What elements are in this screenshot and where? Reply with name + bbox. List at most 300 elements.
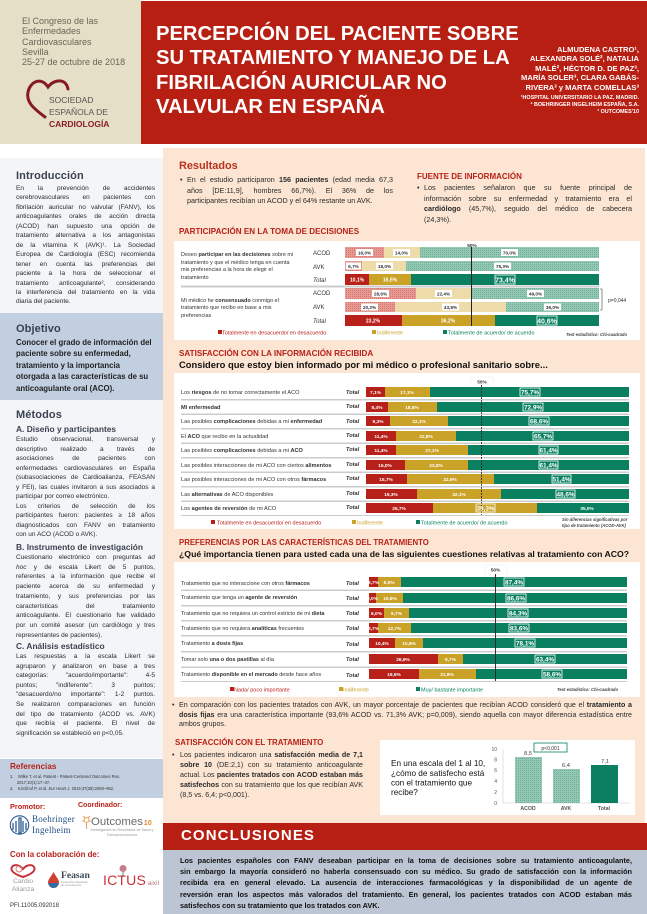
chart: satisfacción con la información: 15,7% (379, 477, 394, 483)
panel: introducción (16, 170, 155, 305)
chart: satisfacción con la información: 8,4% (372, 405, 383, 411)
reference list: 2017;10(1):17–37. (17, 780, 50, 785)
text: análisis: categorías: "acuerdo/importante": 4-5 (16, 672, 155, 679)
chart: participación en la toma de decisiones: 43,8% (444, 305, 458, 310)
chart: satisfacción con la información: Total (346, 404, 360, 410)
text: diseño: participantes fueron: pacientes ≥ 18 años (16, 512, 155, 519)
chart: satisfacción con la información: Indiferente (357, 520, 383, 526)
affiliations: ¹HOSPITAL UNIVERSITARIO LA PAZ, MADRID. (521, 95, 639, 101)
heading: métodos: Métodos (16, 409, 62, 421)
chart: participación en la toma de decisiones: 73,4% (495, 278, 516, 284)
chart: satisfacción con el tratamiento: ¿cómo de satisfecho está (391, 769, 485, 778)
text: introducción: Europea de Cardiología (ESC) recomienda (16, 251, 155, 258)
chart: preferencias por las características: Total (346, 611, 359, 617)
text: introducción: tratamiento anticoagulante², considerando (16, 280, 155, 287)
chart: preferencias por las características: Total (346, 673, 359, 679)
chart: preferencias por las características: Nada/ poco importante (234, 688, 290, 694)
chart: preferencias por las características: 50% (491, 568, 501, 574)
text: instrumento: referentes a la información que recibe el (16, 573, 155, 580)
chart: satisfacción con el tratamiento: con el tratamiento que (391, 778, 472, 788)
chart: satisfacción con la información: Las posibles complicaciones debidas a mi ACO (181, 448, 304, 454)
chart: participación en la toma de decisiones: 70,0% (503, 250, 517, 256)
chart: preferencias por las características: 9,7% (445, 657, 457, 663)
footer code: PFI.11005.092018 (10, 903, 59, 909)
text: objetivo: Conocer el grado de información del (16, 338, 152, 347)
text: diseño: Estudio observacional, transversal y (16, 436, 155, 443)
chart: participación en la toma de decisiones: Test estadístico: Chi-cuadrado (566, 332, 627, 337)
chart: preferencias por las características: 78,1% (516, 640, 534, 648)
title: FIBRILACIÓN AURICULAR NO (156, 72, 447, 94)
chart: participación en la toma de decisiones: 18,0% (378, 264, 392, 269)
chart: participación en la toma de decisiones: tratamiento que recibo en base a mis (181, 305, 272, 311)
chart: participación en la toma de decisiones: 23,2% (366, 318, 381, 324)
chart: satisfacción con la información: 32,9% (443, 477, 458, 483)
logo: Feasan: de Asociaciones (61, 883, 81, 887)
authors: MARÍA SOLER³, CLARA GABÁS- (521, 73, 639, 82)
chart: participación en la toma de decisiones: Mi médico he consensuado conmigo el (181, 298, 279, 304)
chart: satisfacción con el tratamiento: Total (598, 806, 611, 812)
chart: participación en la toma de decisiones: tratamiento y que el médico tenga en cuenta (181, 260, 290, 266)
chart: satisfacción con la información: 72,9% (524, 404, 542, 412)
logo: Feasan (48, 870, 90, 888)
chart: participación en la toma de decisiones: 49,0% (529, 292, 543, 296)
subheading: satisfacción información: Considero que estoy bien informado por mi médico o profesional sanitario sobre... (179, 359, 548, 370)
heading: satisfacción información: SATISFACCIÓN CON LA INFORMACIÓN RECIBIDA (179, 349, 373, 358)
text: análisis (16, 653, 155, 737)
text: instrumento: características del tratamiento (16, 603, 155, 610)
chart: satisfacción con el tratamiento: 2 (494, 790, 497, 796)
text: introducción: fibrilación auricular no valvular (FANV), los (16, 204, 155, 211)
chart: satisfacción con la información: Total (346, 419, 360, 425)
title: PERCEPCIÓN DEL PACIENTE SOBRE (156, 23, 519, 45)
chart: preferencias por las características: 87,4% (505, 580, 523, 586)
congress details: Enfermedades (22, 26, 81, 36)
chart: participación en la toma de decisiones: p=0,044 (608, 298, 626, 304)
chart: preferencias por las características: Total (346, 596, 359, 602)
chart: satisfacción con el tratamiento: ACOD (520, 806, 536, 812)
chart: preferencias por las características: 3,7% (368, 626, 380, 632)
logo: Ictus (103, 865, 159, 888)
reference list: 1. Wilke T, et al. Patient - Patient-Centered Outcomes Res. (10, 774, 120, 779)
heading: diseño y participantes: A. Diseño y participantes (16, 424, 116, 434)
authors (521, 45, 639, 92)
heading: coordinador: Coordinador: (78, 802, 122, 809)
chart: preferencias por las características: 19,5% (387, 672, 402, 678)
text: objetivo: tratamiento y la importancia (16, 361, 120, 370)
chart: satisfacción con la información: 48,6% (556, 492, 575, 498)
text: fuente de información (417, 183, 632, 224)
heading: fuente de información: FUENTE DE INFORMACIÓN (417, 172, 522, 181)
chart: satisfacción con el tratamiento: En una escala del 1 al 10, (391, 759, 485, 768)
heading: objetivo: Objetivo (16, 323, 61, 335)
text: conclusiones: sin embargo la mayoría consideró no haberla consensuado con su médico. Su grado de satisfacción con la información (180, 867, 632, 876)
chart: satisfacción con el tratamiento: recibe? (391, 788, 418, 797)
chart: satisfacción con la información: Las posibles complicaciones debidas a mi enfermedad (181, 419, 323, 425)
logo: Ictus: ICTUS aixil (103, 872, 159, 888)
authors: ALMUDENA CASTRO¹, (557, 45, 639, 54)
chart: satisfacción con la información (174, 373, 640, 529)
heading: participación: PARTICIPACIÓN EN LA TOMA DE DECISIONES (179, 227, 359, 236)
chart: participación en la toma de decisiones: 40,6% (537, 318, 558, 326)
chart: satisfacción con la información: Totalmente en desacuerdo/ en desacuerdo (217, 520, 321, 526)
logo: Sociedad Española de Cardiología (26, 79, 110, 129)
chart: preferencias por las características: Total (346, 657, 359, 663)
chart: satisfacción con la información: Mi enfermedad (181, 405, 221, 411)
chart: participación en la toma de decisiones: 22,4% (437, 292, 451, 296)
text: comparación bullet (172, 701, 632, 728)
chart: preferencias por las características: Tratamiento que no requiera analíticas frecuentes (181, 626, 304, 632)
chart: satisfacción con la información: Sin diferencias significativas por (562, 517, 628, 522)
chart: satisfacción con la información: Las posibles interacciones de mi ACO con otros fármacos (181, 477, 326, 483)
text: análisis: puntos; "indiferente": 3 puntos; (16, 682, 155, 689)
text: diseño: participar por correo electrónico. (16, 493, 109, 500)
chart: preferencias por las características: 10,4% (375, 641, 390, 647)
text: análisis: Las respuestas a la escala Likert se (16, 653, 155, 660)
panel: métodos (16, 409, 156, 737)
text: satisfacción tratamiento (172, 751, 363, 799)
title: SU TRATAMIENTO Y MANEJO DE LA (156, 47, 510, 69)
authors: MALÉ², HÉCTOR D. DE PAZ³, (535, 64, 639, 73)
chart: preferencias por las características: 12,7% (388, 626, 402, 632)
text: análisis: Se realizaron comparaciones en función (16, 701, 155, 708)
chart: participación en la toma de decisiones: AVK (313, 305, 325, 311)
text: objetivo: paciente sobre su enfermedad, (16, 349, 131, 358)
heading: promotor: Promotor: (10, 802, 45, 811)
chart: preferencias por las características: 83,6% (510, 626, 528, 632)
chart: participación en la toma de decisiones: 36,2% (441, 318, 456, 324)
chart: satisfacción con el tratamiento: 6,4 (562, 763, 571, 769)
logo: Cardio Alianza: Cardio (13, 878, 33, 885)
chart: satisfacción con la información: Total (346, 447, 360, 453)
chart: satisfacción con la información: Total (346, 505, 360, 511)
chart: preferencias por las características: 26,9% (396, 657, 411, 663)
chart: participación en la toma de decisiones: 16,5% (383, 278, 398, 284)
text: introducción: (ACOD) han supuesto una opción de (16, 223, 155, 230)
text: satisfacción tratamiento: actual. Los pacientes tratados con ACOD estaban más (180, 771, 363, 779)
chart: participación en la toma de decisiones (174, 241, 640, 340)
title: VALVULAR EN ESPAÑA (156, 96, 385, 118)
chart: satisfacción con el tratamiento: AVK (561, 806, 572, 812)
text: introducción: cerebrovasculares en pacientes con (16, 194, 155, 201)
chart: participación en la toma de decisiones: ACOD (313, 251, 331, 257)
text: introducción: de la vitamina K (AVK)¹. La Sociedad (16, 242, 155, 249)
chart: satisfacción con la información: 39,3% (476, 506, 495, 512)
text: diseño: enfermedades cardiovasculares en España (16, 464, 155, 472)
logo: Sociedad Española de Cardiología: ESPAÑOLA DE (49, 107, 108, 117)
chart: satisfacción con la información: tipo de tratamiento (ACOD-AVK) (562, 523, 627, 528)
logo: Outcomes 10 (82, 816, 154, 837)
text: diseño (16, 436, 155, 538)
chart: preferencias por las características: Total (346, 581, 359, 587)
text: diseño: y FEI), las cuales invitaron a sus asociados a (16, 484, 155, 490)
chart: participación en la toma de decisiones: 14,0% (395, 250, 409, 256)
text: instrumento: hoc y de escala Likert de 5 puntos, (16, 564, 155, 571)
chart: preferencias por las características: 86,6% (507, 596, 525, 602)
text: análisis: significación se estableció en p<0,05. (16, 730, 124, 737)
chart: satisfacción con la información: Las alternativas de ACO disponibles (181, 492, 274, 498)
chart: satisfacción con la información: Total (346, 476, 360, 482)
chart: satisfacción con la información: Totalmente de acuerdo/ de acuerdo (421, 520, 508, 526)
text: fuente de información: información sobre su enfermedad y tratamiento era el (424, 194, 632, 203)
text: resultados bullet: participantes recibían un ACOD y el 64% restante un AVK. (187, 196, 373, 205)
chart: participación en la toma de decisiones: Totalmente en desacuerdo/ en desacuerdo (222, 330, 326, 336)
chart: participación en la toma de decisiones: 20,2% (363, 305, 377, 310)
text: análisis: que recibía el paciente. El nivel de (16, 720, 155, 727)
chart: satisfacción con la información: 11,4% (374, 434, 388, 440)
chart: satisfacción con la información: 35,0% (580, 506, 595, 512)
text: comparación bullet: dosis fijas era una característica importante (93,6% ACOD vs. 71,3% AVK; p=0,009), siendo aquella con mayor diferencia estadística entre (179, 711, 632, 719)
chart: satisfacción con la información: 25,7% (392, 506, 407, 512)
chart: satisfacción con la información: 75,7% (521, 390, 539, 396)
panel: left column background (0, 158, 163, 758)
chart: preferencias por las características: Test estadístico: Chi-cuadrado (557, 687, 618, 692)
text: resultados bullet: En el estudio participaron 156 pacientes (edad media 67,3 (187, 175, 393, 184)
text: comparación bullet: ambos grupos. (179, 720, 226, 728)
text: conclusiones (180, 856, 632, 910)
heading: instrumento: B. Instrumento de investigación (16, 542, 143, 552)
text: diseño: descriptivo realizado a través de (16, 446, 155, 452)
chart: satisfacción con la información: Total (346, 462, 360, 468)
chart: preferencias por las características: 10,6% (383, 596, 398, 602)
chart: participación en la toma de decisiones: Total (313, 278, 326, 284)
text: introducción: anticoagulantes orales de acción directa (16, 213, 155, 220)
chart: participación en la toma de decisiones: Deseo participar en las decisiones sobre mi (181, 252, 293, 258)
chart: satisfacción con la información: 9,3% (373, 419, 384, 425)
chart: satisfacción con el tratamiento: 0 (494, 801, 497, 807)
panel: results background (163, 148, 645, 823)
authors: RIVERA³ y MARTA COMELLAS³ (526, 83, 639, 92)
chart: preferencias por las características: Tomar solo una o dos pastillas al día (181, 657, 275, 663)
header: congress panel (0, 0, 141, 144)
chart: satisfacción con la información: 51,4% (552, 476, 571, 484)
chart: satisfacción con la información: El ACO que recibo en la actualidad (181, 434, 268, 440)
text: satisfacción tratamiento: sobre 10 (DE:2,1) con su tratamiento anticoagulante (180, 761, 363, 769)
chart: satisfacción con la información: 22,8% (419, 434, 434, 440)
text: fuente de información: (24,3%). (424, 215, 451, 224)
text: diseño: con un ACO (ACOD o AVK). (16, 531, 97, 538)
logo: Outcomes 10: Outcomes10 (91, 816, 152, 828)
chart: satisfacción con la información: 27,1% (425, 448, 440, 454)
chart: participación en la toma de decisiones: Total (313, 319, 326, 325)
chart: participación en la toma de decisiones: ACOD (313, 291, 331, 297)
logo: Cardio Alianza (10, 864, 36, 893)
text: instrumento: Cuestionario electrónico con preguntas ad (16, 554, 155, 561)
panel: objetivo (0, 313, 163, 400)
chart: satisfacción con el tratamiento: p<0,001 (541, 746, 560, 752)
chart: participación en la toma de decisiones: 10,1% (350, 278, 365, 284)
reference list (10, 774, 120, 791)
chart: preferencias por las características: Tratamiento que no requiera un control estricto de mi dieta (181, 611, 325, 617)
congress details: Sevilla (22, 47, 49, 57)
chart: participación en la toma de decisiones: Totalmente de acuerdo/ de acuerdo (448, 330, 535, 336)
text: fuente de información: Los pacientes señalaron que su fuente principal de (424, 183, 632, 192)
chart: satisfacción con la información: Los riesgos de no tomar correctamente el ACO (181, 390, 300, 396)
logo: Boehringer Ingelheim (10, 814, 75, 835)
text: instrumento: representantes de pacientes). (16, 632, 102, 639)
chart: satisfacción con la información: 61,4% (539, 448, 558, 454)
chart: satisfacción con la información: 50% (477, 380, 488, 386)
text: diseño: diagnosticados con FANV en tratamiento (16, 522, 155, 528)
chart: participación en la toma de decisiones: 50% (467, 243, 478, 249)
text: satisfacción tratamiento: • (172, 751, 174, 759)
chart: satisfacción con la información: 19,3% (384, 492, 399, 498)
chart: satisfacción con la información: Total (346, 390, 360, 396)
heading: con la colaboración de: Con la colaboración de: (10, 850, 99, 859)
chart: satisfacción con la información: 65,7% (534, 434, 552, 440)
text: objetivo (16, 338, 152, 393)
chart: preferencias por las características: Tratamiento que tenga un agente de reversión (181, 595, 298, 601)
text: diseño: Los criterios de selección de los (16, 502, 155, 510)
logo: Boehringer Ingelheim: Boehringer (32, 814, 75, 824)
text: conclusiones: Los pacientes españoles con FANV deseaban participar en la toma de decisiones sobre su tratamiento anticoagulante, (180, 856, 632, 865)
chart: preferencias por las características: 10,6% (402, 641, 417, 647)
chart: participación en la toma de decisiones: 16,0% (358, 250, 372, 256)
heading: resultados: Resultados (179, 160, 238, 172)
header: red title panel (141, 1, 647, 144)
text: introducción: diaria del paciente. (16, 298, 71, 305)
chart: satisfacción con el tratamiento: 6 (494, 768, 497, 774)
text: fuente de información: cardiólogo (45,7%), seguido del médico de cabecera (424, 204, 632, 213)
chart: satisfacción con la información: Los agentes de reversión de mi ACO (181, 506, 277, 512)
title (156, 22, 519, 118)
panel: referencias (0, 759, 163, 798)
chart: satisfacción con la información: 18,8% (405, 405, 420, 411)
chart: satisfacción con el tratamiento: 8,5 (524, 751, 532, 757)
chart: satisfacción con la información: 22,1% (412, 419, 427, 425)
chart: satisfacción con el tratamiento: 7,1 (601, 759, 609, 765)
chart: preferencias por las características: 21,9% (440, 672, 455, 678)
chart: participación en la toma de decisiones: 75,3% (496, 264, 510, 269)
text: objetivo: anticoagulante oral (ACO). (16, 384, 114, 393)
text: introducción: tener en cuenta las preferencias del (16, 261, 155, 268)
chart: preferencias por las características: 6,0% (371, 611, 383, 617)
heading: introducción: Introducción (16, 170, 84, 182)
text: análisis: "desacuerdo/no importante": 1-2 puntos. (16, 691, 155, 698)
chart: preferencias por las características: 84,3% (509, 610, 527, 618)
chart: preferencias por las características: Muy/ bastante importante (421, 688, 483, 694)
chart: preferencias por las características: Total (346, 626, 359, 632)
text: conclusiones: satisfechos con su tratamiento que los tratados con AVK. (180, 901, 380, 910)
heading: referencias: Referencias (10, 762, 56, 771)
chart: satisfacción con el tratamiento: 10 (491, 747, 497, 753)
chart: preferencias por las características: 8,9% (384, 580, 395, 586)
logo: Boehringer Ingelheim: Ingelheim (32, 825, 71, 835)
congress details: El Congreso de las (22, 16, 98, 26)
chart: preferencias por las características: 3,0% (367, 596, 379, 602)
chart: satisfacción con la información: Total (346, 491, 360, 497)
logo: Sociedad Española de Cardiología: CARDIOLOGÍA (49, 119, 109, 129)
text: conclusiones: recibida era en general elevado. La ausencia de interacciones farmacológicas y la disponibilidad de un agente de (180, 878, 632, 887)
chart: preferencias por las características (174, 562, 640, 697)
chart: satisfacción con el tratamiento (380, 740, 635, 815)
affiliations: ² BOEHRINGER INGELHEIM ESPAÑA, S.A. (531, 102, 639, 108)
chart: satisfacción con la información: 61,4% (539, 462, 558, 470)
text: análisis: agruparon y analizaron en base a tres (16, 663, 155, 670)
text: introducción: paciente a la hora de seleccionar el (16, 270, 155, 277)
text: instrumento: por un comité asesor (un cardiólogo y tres (16, 622, 155, 629)
chart: participación en la toma de decisiones: Indiferente (377, 330, 403, 336)
chart: preferencias por las características: 63,4% (536, 656, 554, 664)
chart: satisfacción con la información: 15,0% (378, 463, 393, 469)
congress details (22, 16, 125, 67)
chart: participación en la toma de decisiones: 6,7% (348, 264, 360, 269)
text: fuente de información: • (417, 183, 420, 192)
chart: preferencias por las características: Tratamiento a dosis fijas (181, 641, 243, 647)
text: satisfacción tratamiento: (8,5 vs. 6,4; p<0,001). (180, 791, 249, 799)
text: objetivo: otorgada a las características de su (16, 372, 148, 381)
panel: conclusiones heading (163, 823, 647, 850)
chart: participación en la toma de decisiones: mis preferencias a la hora de elegir el (181, 267, 273, 273)
chart: satisfacción con el tratamiento: 4 (494, 779, 497, 785)
text: resultados bullet: • (180, 175, 183, 184)
reference list: 2. Kirchhof P, et al. Eur Heart J. 2016;37(38):2893–962. (10, 786, 114, 791)
heading: satisfacción tratamiento: SATISFACCIÓN CON EL TRATAMIENTO (175, 738, 323, 747)
affiliations: ³ OUTCOMES'10 (597, 109, 639, 115)
chart: participación en la toma de decisiones: 28,6% (374, 292, 388, 296)
chart: satisfacción con la información: 17,1% (400, 390, 415, 396)
chart: preferencias por las características: Tratamiento que no interaccione con otros fármacos (181, 581, 310, 587)
heading: preferencias: PREFERENCIAS POR LAS CARACTERÍSTICAS DEL TRATAMIENTO (179, 538, 429, 547)
heading: análisis estadístico: C. Análisis estadístico (16, 641, 105, 651)
text: instrumento: tratamiento, y sus preferencias por las (16, 593, 155, 600)
logo: Feasan: Feasan (61, 870, 90, 881)
text: instrumento (16, 554, 156, 639)
heading: conclusiones: CONCLUSIONES (181, 827, 315, 844)
text: satisfacción tratamiento: Los pacientes indicaron una satisfacción media de 7,1 (180, 751, 363, 759)
chart: participación en la toma de decisiones: AVK (313, 265, 325, 271)
logo: Outcomes 10: Investigación en Resultados de Salud y Farmacoeconomía (91, 828, 153, 837)
text: instrumento: paciente acerca de su enfermedad y (16, 583, 155, 590)
text: resultados bullet: años [DE:11,9], hombres 66,7%). El 36% de los (187, 186, 393, 195)
chart: preferencias por las características: Indiferente (343, 688, 369, 694)
logo: Cardio Alianza: Alianza (12, 886, 34, 893)
text: análisis: del tipo de tratamiento (ACOD vs. AVK) (16, 711, 155, 718)
text: instrumento: anticoagulante. El cuestionario fue validado (16, 612, 155, 619)
chart: preferencias por las características: Tratamiento disponible en el mercado desde hace años (181, 672, 321, 678)
congress details: Cardiovasculares (22, 37, 92, 47)
chart: satisfacción con la información: 7,1% (370, 390, 382, 396)
text: comparación bullet: • (172, 701, 174, 709)
chart: satisfacción con la información: Total (346, 433, 360, 439)
text: resultados bullet (180, 175, 393, 205)
chart: satisfacción con la información: 68,6% (530, 418, 548, 426)
text: conclusiones: reversión eran los aspectos más valorados del tratamiento. En general, los pacientes tratados con ACOD estaban más (180, 890, 632, 899)
authors: ALEXANDRA SOLÉ², NATALIA (530, 54, 639, 63)
text: diseño: asociaciones de pacientes con (16, 455, 155, 462)
chart: preferencias por las características: 3,7% (368, 580, 380, 586)
chart: preferencias por las características: 9,7% (391, 611, 403, 617)
text: introducción: tratamiento alternativa a los antagonistas (16, 232, 155, 239)
congress details: 25-27 de octubre de 2018 (22, 57, 125, 67)
text: comparación bullet: En comparación con los pacientes tratados con AVK, un mayor porcentaje de pacientes que recibían ACOD consideró que el tratamiento a (179, 701, 632, 709)
chart: satisfacción con la información: Las posibles interacciones de mi ACO con ciertos alimentos (181, 463, 332, 469)
chart: satisfacción con el tratamiento: 8 (494, 758, 497, 764)
chart: preferencias por las características: 58,6% (543, 672, 561, 678)
chart: satisfacción con la información: 32,1% (452, 492, 467, 498)
text: introducción (16, 185, 155, 305)
subheading: preferencias: ¿Qué importancia tienen para usted cada una de las siguientes cuestiones relativas al tratamiento con ACO? (179, 549, 629, 559)
logo: Feasan: Federación Española (61, 880, 87, 884)
chart: satisfacción con la información: 23,8% (429, 463, 444, 469)
text: diseño: (subasociaciones de Cardioalianza, FEASAN (16, 474, 155, 481)
panel: conclusiones text (163, 850, 647, 914)
chart: participación en la toma de decisiones: tratamiento (181, 275, 209, 281)
logo: Sociedad Española de Cardiología: SOCIEDAD (49, 95, 93, 105)
chart: preferencias por las características: Total (346, 642, 359, 648)
text: introducción: la interferencia del tratamiento en la vida (16, 289, 155, 296)
chart: participación en la toma de decisiones: preferencias (181, 313, 212, 319)
chart: satisfacción con la información: 11,4% (374, 448, 388, 454)
